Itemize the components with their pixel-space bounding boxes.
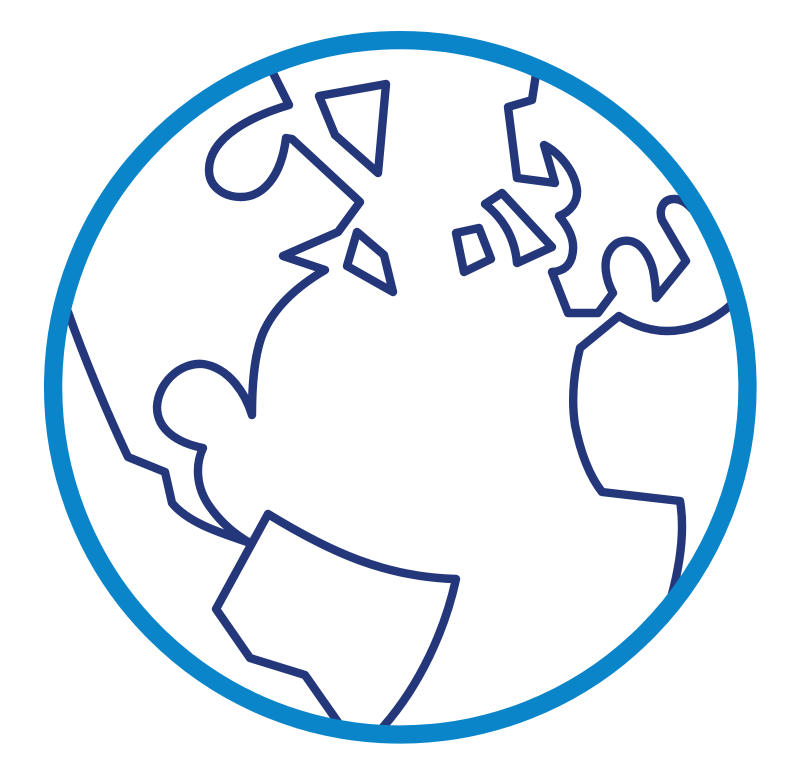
north coast with bay — [68, 71, 360, 543]
island: central kite — [347, 232, 393, 292]
island: north triangle — [319, 84, 386, 173]
northeast coast — [508, 74, 692, 313]
island: curved strip — [485, 193, 552, 263]
island: small square — [456, 228, 491, 272]
continent outlines — [68, 71, 732, 727]
east continent — [573, 304, 732, 598]
south continent — [216, 514, 456, 727]
globe ring — [53, 40, 748, 734]
